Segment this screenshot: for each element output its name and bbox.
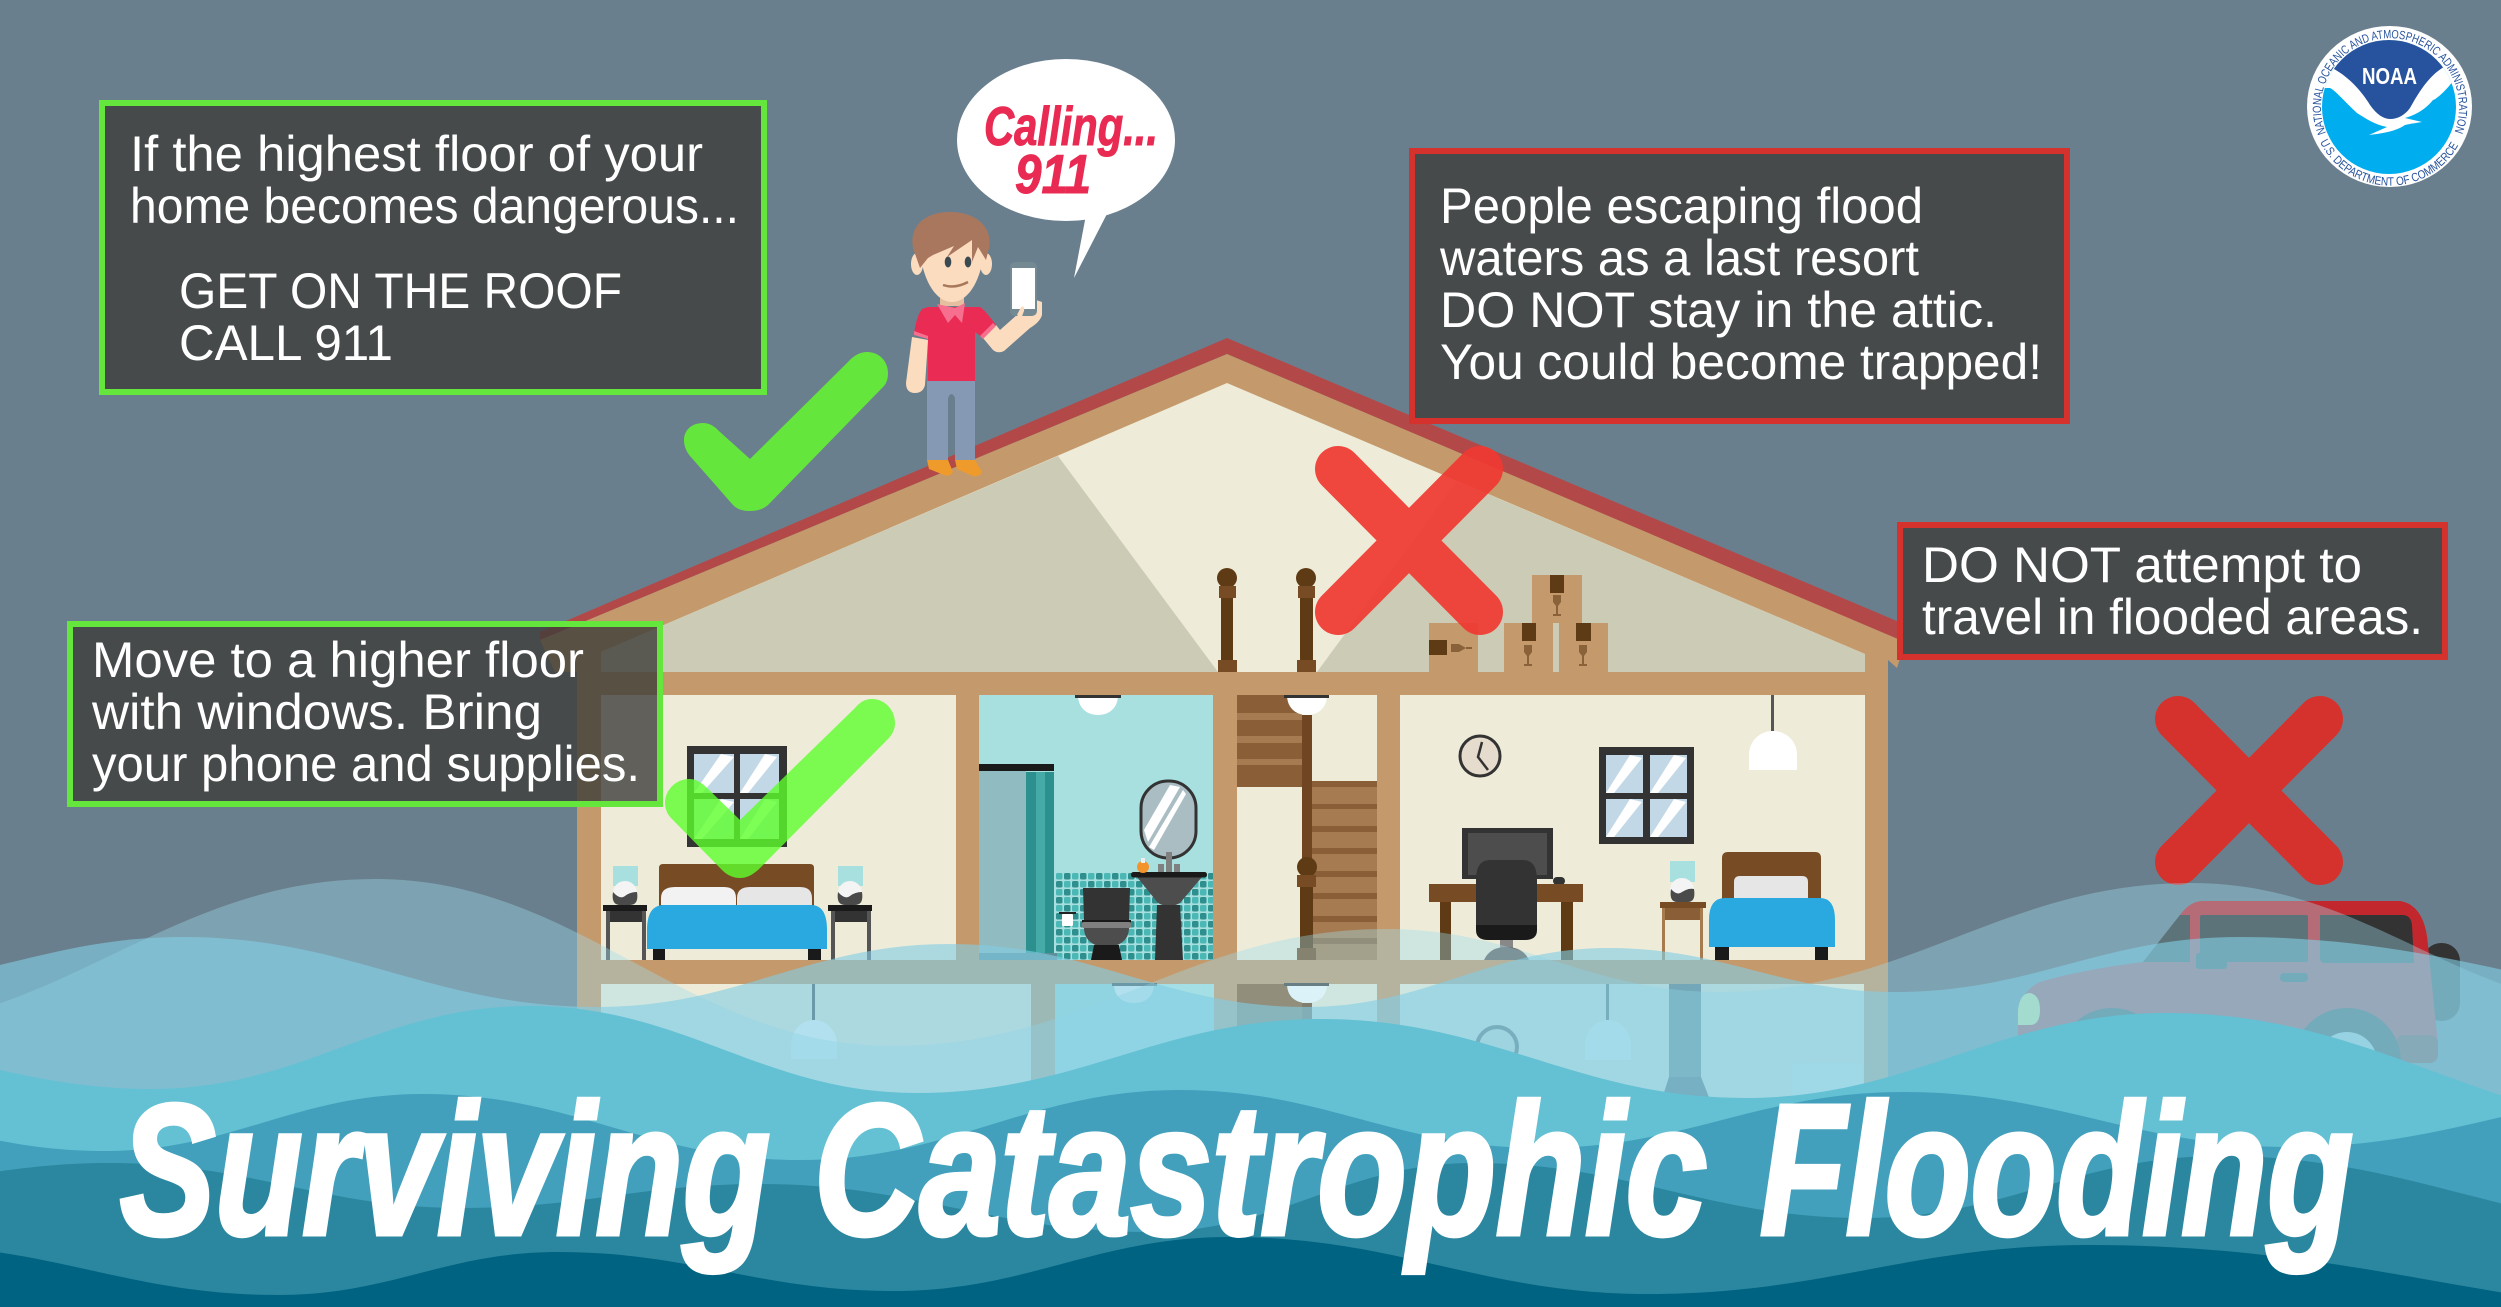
face: [919, 235, 985, 302]
car mirror: [2196, 953, 2227, 969]
nightstand right: [828, 866, 872, 960]
check mark on roof: [684, 352, 888, 511]
callout text: travel in flooded areas.: [1922, 589, 2423, 645]
house: [540, 338, 1911, 1124]
check mark upper floor: [665, 699, 895, 878]
callout text: home becomes dangerous...: [130, 178, 739, 234]
callout text: with windows. Bring: [91, 684, 542, 740]
callout text: If the highest floor of your: [130, 126, 703, 182]
callout text: [1439, 178, 2042, 390]
callout text: People escaping flood: [1440, 178, 1923, 234]
room window: [1599, 747, 1694, 844]
shoes: [927, 460, 982, 476]
legs: [927, 381, 975, 460]
spare tire: [2423, 943, 2460, 1021]
staircase: [1237, 695, 1377, 960]
bumper: [2396, 1035, 2438, 1063]
callout: move to a higher floor: [70, 624, 660, 804]
headlight: [2018, 993, 2040, 1025]
bubble text: Calling...: [984, 95, 1158, 157]
stair lamp: [1284, 695, 1329, 715]
callout text: waters as a last resort: [1439, 230, 1919, 286]
speech bubble: [957, 59, 1175, 278]
rear wheel: [2317, 1032, 2377, 1092]
lower rooms: [601, 983, 1864, 1124]
blanket: [647, 905, 827, 949]
NOAA logo: [2307, 26, 2472, 187]
bubble text: [984, 95, 1158, 205]
callout text: [91, 632, 640, 792]
logo wordmark: NOAA: [2362, 63, 2417, 89]
back wave B: [0, 937, 2501, 1307]
shower curtain: [979, 764, 1057, 960]
door handle: [2280, 973, 2308, 982]
red X flooded road: [2178, 719, 2320, 862]
office chair: [1476, 860, 1537, 960]
bedroom window: [687, 746, 787, 847]
upper rooms: [601, 695, 1865, 960]
roof: [540, 338, 1911, 645]
callout: attic warning: [1412, 151, 2067, 421]
title: Catastrophic: [814, 1067, 1707, 1274]
red X attic: [1338, 469, 1480, 612]
phone: [1010, 262, 1037, 316]
left bedroom: [603, 746, 872, 960]
logo emblem: [2320, 38, 2460, 178]
logo ring text: U.S. DEPARTMENT OF COMMERCE: [2321, 138, 2458, 186]
ears: [911, 253, 992, 275]
sleeve cuffs: [914, 323, 996, 339]
house frame: [540, 354, 1905, 1120]
callout text: GET ON THE ROOF: [179, 263, 622, 319]
pendant lamp: [1749, 695, 1797, 770]
bed legs: [653, 949, 665, 960]
callout text: [130, 126, 739, 371]
bathroom lamp: [1075, 695, 1121, 715]
wave E: [0, 1156, 2501, 1307]
headboard: [659, 864, 814, 915]
raised arm: [983, 300, 1042, 352]
attic boxes: [1429, 575, 1608, 672]
wave F: [0, 1237, 2501, 1307]
single bed: [1709, 852, 1835, 960]
back wave A: [0, 879, 2501, 1307]
attic shadow left: [601, 456, 1218, 672]
nightstand: [1660, 861, 1706, 960]
attic shadow right: [1317, 481, 1865, 672]
neck: [940, 294, 964, 306]
callout text: DO NOT stay in the attic.: [1440, 282, 1997, 338]
callout: do not travel: [1900, 525, 2445, 657]
title: [120, 1067, 2353, 1274]
collar: [937, 303, 965, 323]
wheel arches: [2058, 1008, 2401, 1116]
hair: [912, 212, 990, 268]
left arm: [906, 337, 928, 393]
logo ring text: NATIONAL OCEANIC AND ATMOSPHERIC ADMINISTRATION: [2312, 30, 2468, 136]
wave C: [0, 1006, 2501, 1307]
wave D: [0, 1090, 2501, 1307]
sink: [1131, 852, 1207, 960]
mirror: [1141, 781, 1196, 858]
car body: [2018, 901, 2438, 1063]
right room: [1429, 695, 1835, 960]
bathroom: [979, 695, 1213, 960]
wall clock: [1460, 736, 1500, 776]
thumb: [1017, 306, 1024, 319]
car windows: [2143, 915, 2414, 963]
callout text: CALL 911: [179, 315, 393, 371]
title: Surviving: [120, 1067, 770, 1274]
callout text: You could become trapped!: [1440, 334, 2042, 390]
pillows: [661, 887, 736, 905]
flooded car: [2018, 901, 2460, 1116]
newel post: [1297, 715, 1317, 960]
balcony posts: [1217, 568, 1316, 672]
callout text: [1922, 537, 2423, 645]
callout text: DO NOT attempt to: [1922, 537, 2362, 593]
shirt: [914, 307, 996, 381]
person on roof: [906, 212, 1042, 476]
callout text: Move to a higher floor: [92, 632, 584, 688]
callout: get on the roof: [102, 103, 764, 392]
facial features: [943, 256, 971, 286]
toilet: [1059, 888, 1131, 960]
desk and monitor: [1429, 828, 1583, 960]
nightstand left: [603, 866, 647, 960]
attic: [601, 383, 1865, 672]
bubble text: 911: [1015, 143, 1091, 205]
callout text: your phone and supplies.: [92, 736, 640, 792]
logo ring text: [2312, 30, 2468, 186]
